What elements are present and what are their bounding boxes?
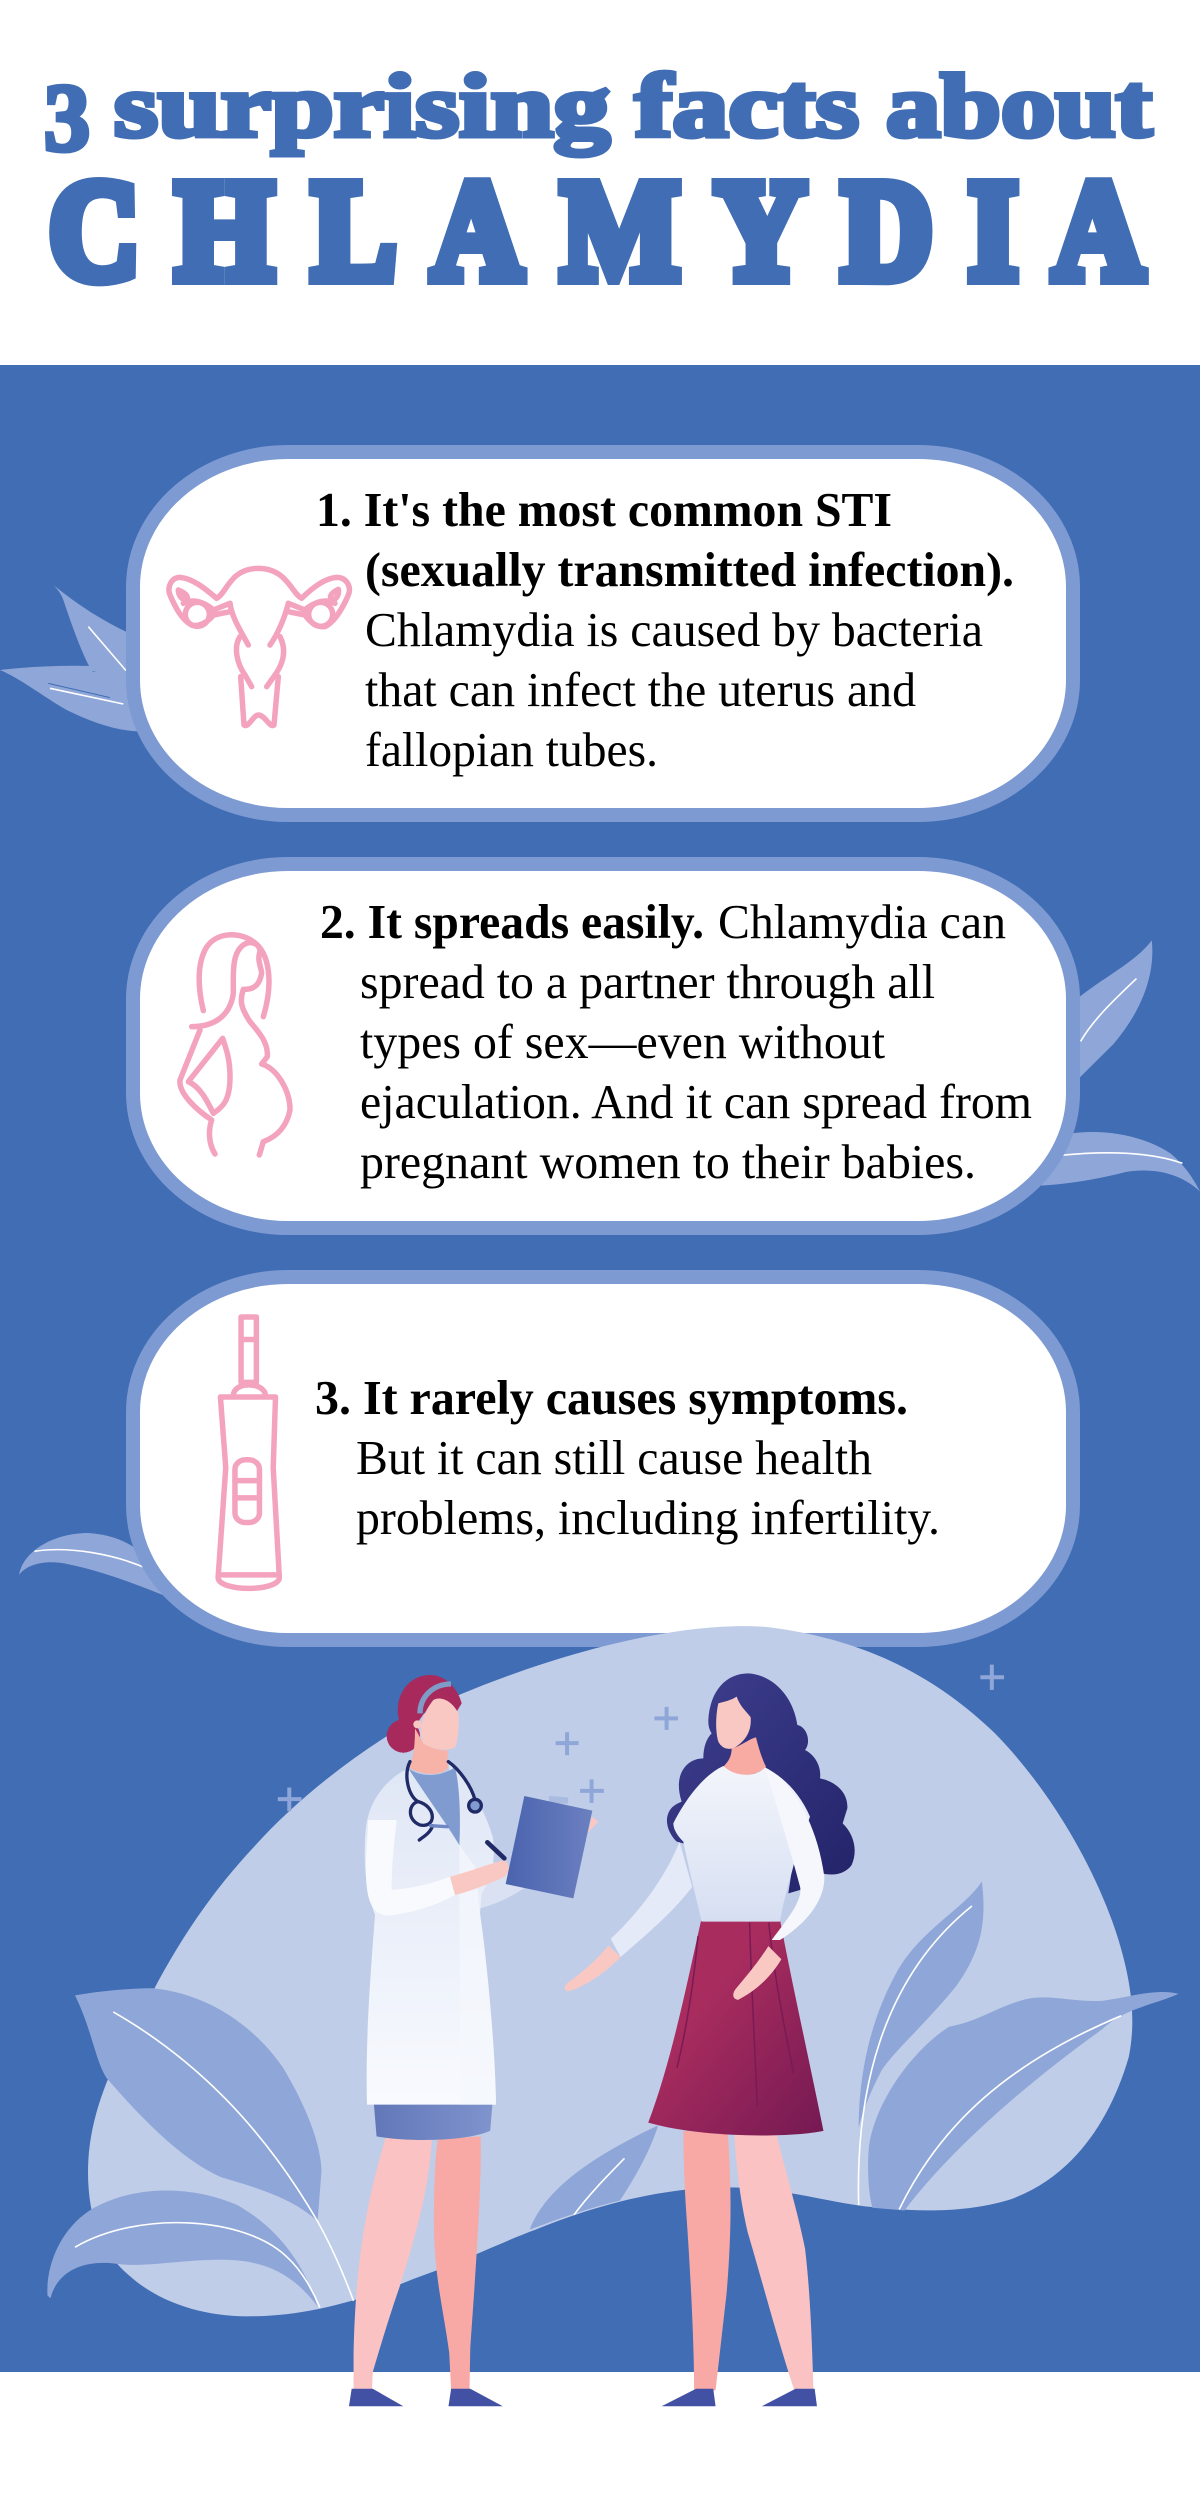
patient neck [723, 1737, 766, 1775]
body line: problems, including infertility. [356, 1490, 940, 1545]
card shape [133, 1277, 1073, 1640]
leaves left of fact 1 [0, 585, 143, 732]
decorative leaves behind fact panels [0, 585, 1200, 1604]
sparkle plus signs [278, 1665, 1004, 1811]
illustration background: blob and plants [47, 1626, 1179, 2316]
icon: pregnant woman [180, 935, 290, 1155]
patient sweater [673, 1766, 810, 1922]
illustration: patient [565, 1673, 855, 2406]
leaves right of fact 2 [1026, 940, 1200, 1191]
illustration: doctor [349, 1675, 598, 2406]
bold lead: 2. It spreads easily. [320, 894, 704, 949]
body line: spread to a partner through all [360, 954, 935, 1009]
stethoscope [407, 1762, 481, 1840]
pen [487, 1842, 504, 1858]
icon: test device [218, 1317, 279, 1588]
doctor upper body [365, 1675, 598, 2105]
icon: uterus [169, 568, 349, 726]
patient lower body [565, 1842, 823, 2406]
body line: ejaculation. And it can spread from [360, 1074, 1032, 1129]
title line: 3 surprising facts about: about [886, 57, 1152, 156]
clipboard [506, 1796, 592, 1898]
doctor sleeve [366, 1820, 455, 1916]
body line: pregnant women to their babies. [360, 1134, 976, 1189]
right tall leaf [858, 1881, 984, 2205]
large left leaf [75, 1988, 354, 2301]
card shape [133, 452, 1073, 815]
doctor hand [450, 1860, 510, 1895]
doctor coat front panel [459, 1845, 496, 2105]
doctor headband [420, 1684, 451, 1713]
doctor shirt [408, 1767, 460, 1845]
doctor neck [408, 1728, 448, 1774]
body line: that can infect the uterus and [365, 662, 916, 717]
body line: But it can still cause health [356, 1430, 872, 1485]
right broad leaf [868, 1992, 1179, 2210]
patient face [716, 1697, 751, 1749]
patient upper body [673, 1697, 824, 1940]
panel: fact 1 [133, 452, 1073, 815]
doctor coat [365, 1762, 496, 2105]
doctor fingers behind clipboard [588, 1817, 598, 1833]
text: fact 1 [316, 482, 1014, 777]
title line: 3 surprising facts about: facts [635, 57, 859, 156]
heading line: 1. It's the most common STI [316, 482, 892, 537]
title line: 3 surprising facts about: 3 [44, 64, 90, 171]
doctor hair [387, 1675, 462, 1753]
patient sleeve [765, 1767, 824, 1940]
patient right hand [733, 1946, 781, 2000]
title [44, 57, 1152, 309]
patient hair [667, 1673, 855, 1893]
doctor ear and face [413, 1699, 459, 1750]
body line: Chlamydia can [718, 894, 1006, 949]
patient near arm sleeve [611, 1842, 692, 1957]
middle leaf behind figures [530, 2125, 658, 2230]
white floor strip [0, 2372, 1200, 2500]
title line: 3 surprising facts about: surprising [114, 57, 610, 156]
panel: fact 3 [133, 1277, 1073, 1640]
bold lead: 3. It rarely causes symptoms. [315, 1370, 908, 1425]
doctor legs, shoes and skirt [349, 2103, 503, 2406]
body line: types of sex—even without [360, 1014, 885, 1069]
patient legs and shoes [662, 2131, 817, 2406]
leaf left of fact 3 [19, 1533, 184, 1604]
doctor far arm [478, 1857, 527, 1908]
card shape [133, 864, 1073, 1228]
panel: fact 2 [133, 864, 1073, 1228]
blob [88, 1626, 1132, 2316]
low left leaf [47, 2190, 320, 2308]
text: fact 3 [315, 1370, 940, 1545]
patient left hand [565, 1946, 621, 1991]
heading line continued: (sexually transmitted infection). [365, 542, 1014, 597]
body line: fallopian tubes. [365, 722, 658, 777]
title line: CHLAMYDIA: CHLAMYDIA [49, 152, 1144, 309]
patient skirt [648, 1921, 823, 2136]
body line: Chlamydia is caused by bacteria [365, 602, 983, 657]
text: fact 2 [320, 894, 1032, 1189]
